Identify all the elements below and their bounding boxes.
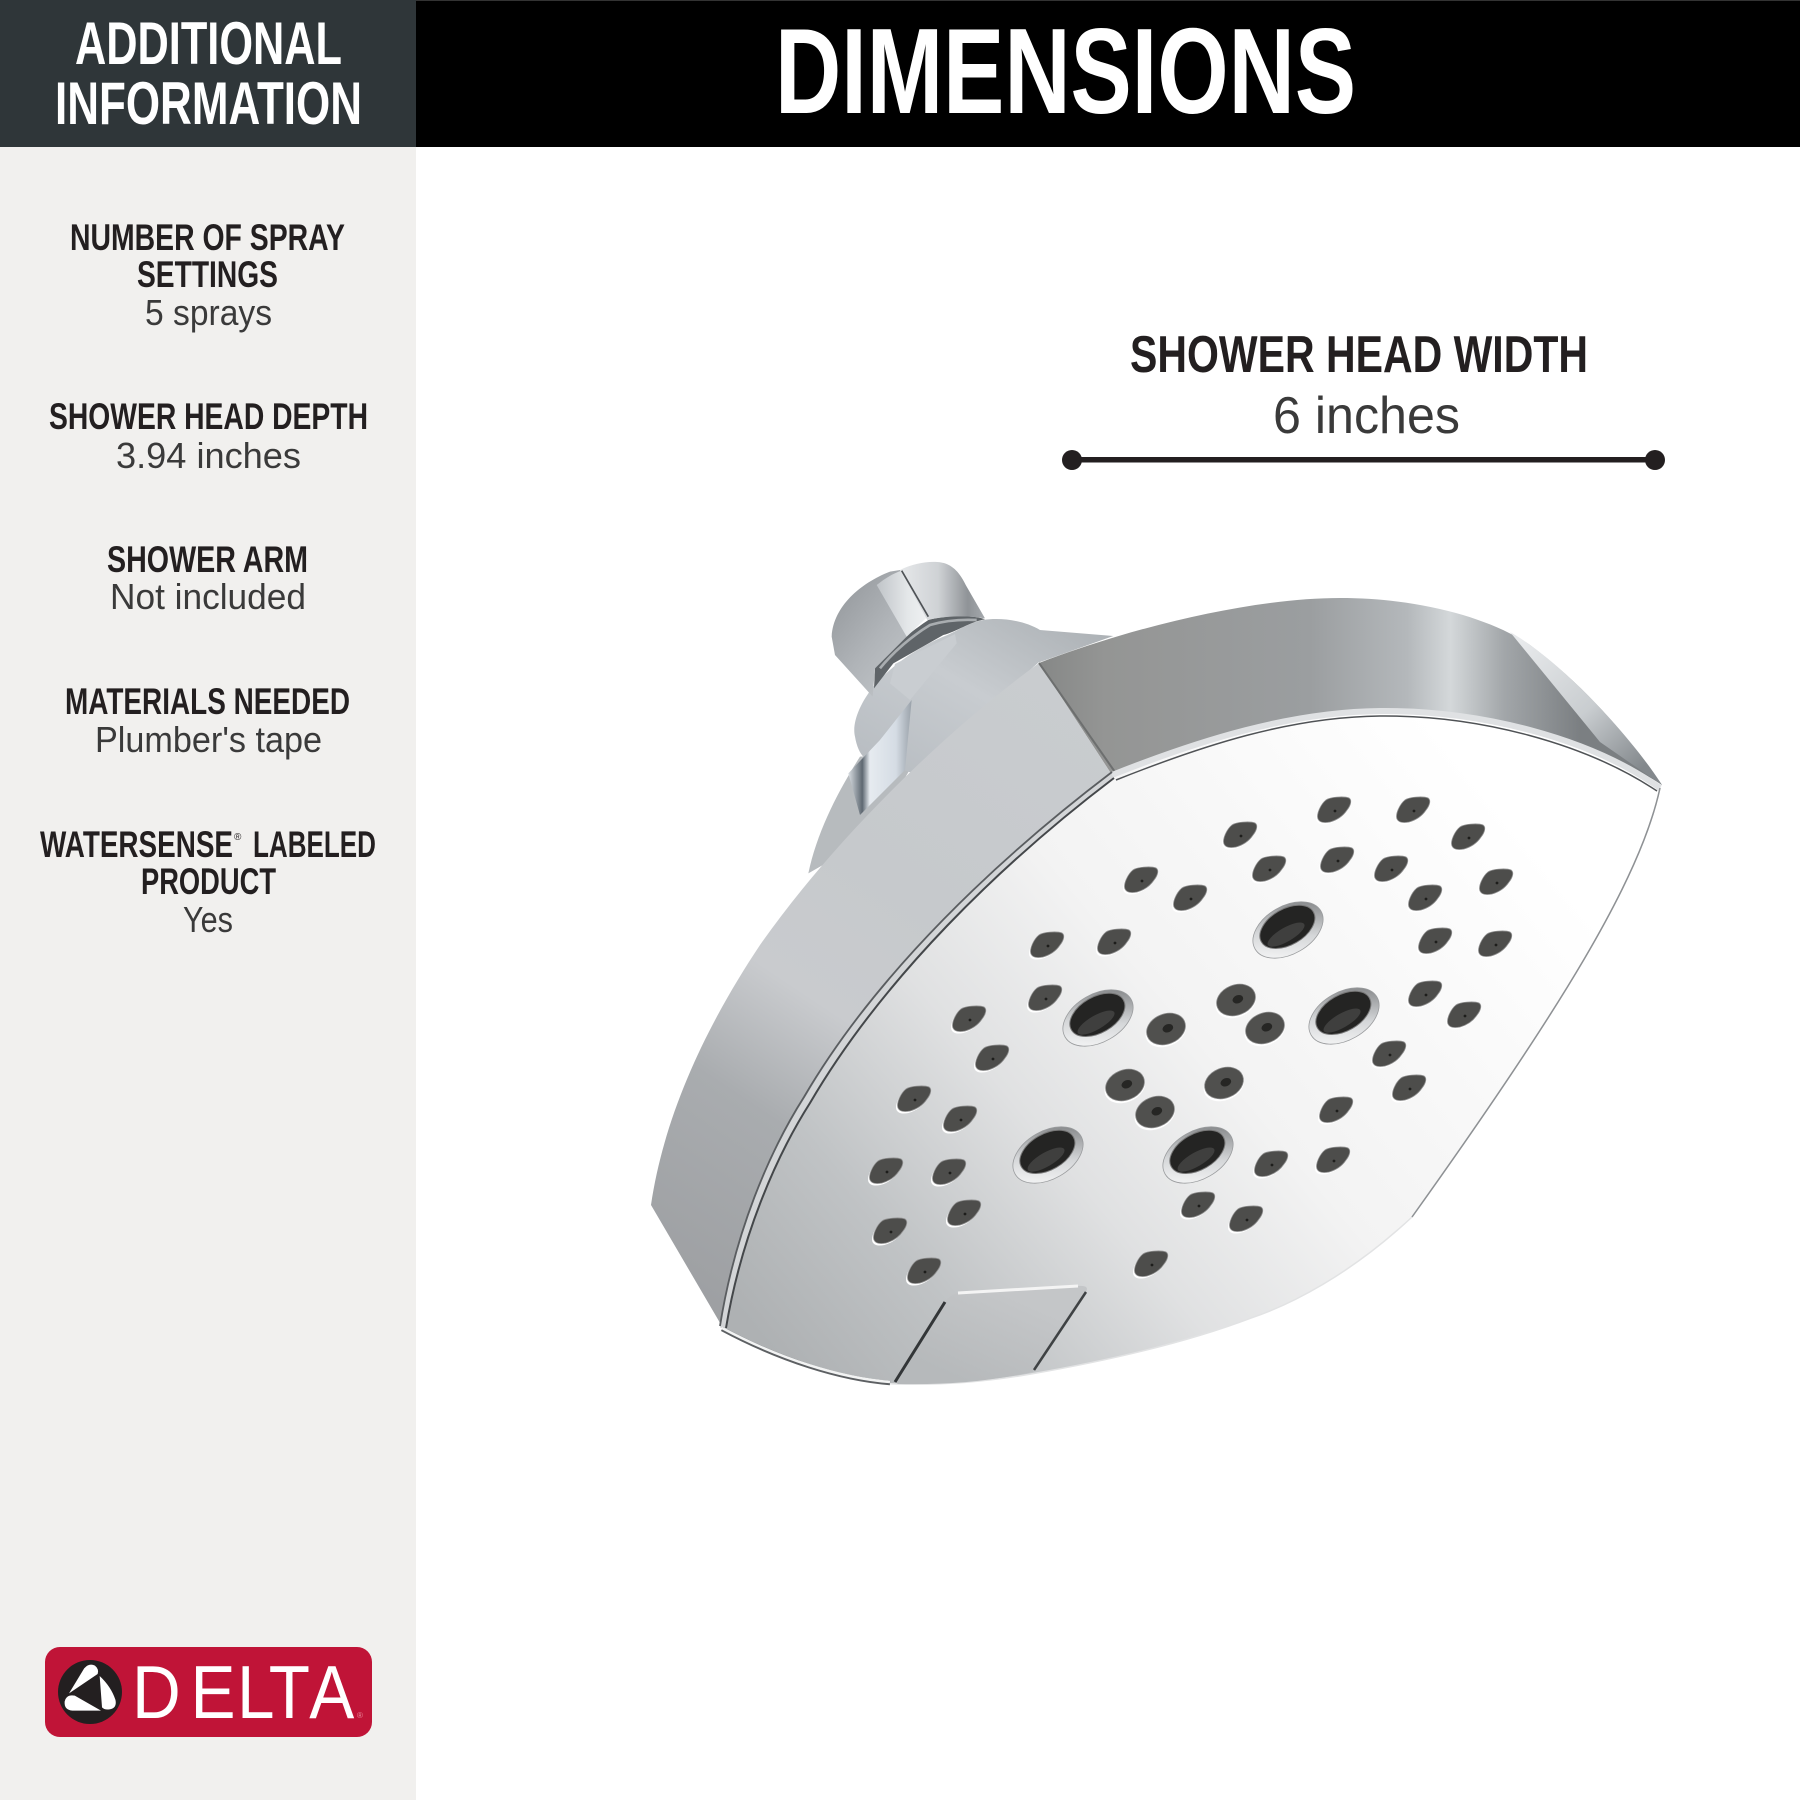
body: right side sliver — [1510, 632, 1662, 785]
text block: number of spray settings: 5 sprays — [145, 292, 272, 333]
text block: shower arm: Not included — [110, 576, 306, 617]
text block: shower head width: SHOWER HEAD WIDTH — [1130, 326, 1588, 384]
logo: delta: ® — [357, 1711, 363, 1720]
product image: shower head — [651, 562, 1662, 1384]
spray nozzles: small — [868, 797, 1513, 1286]
heading: additional information: INFORMATION — [55, 70, 362, 137]
text block: shower head width — [1130, 326, 1588, 445]
text block: shower head depth: 3.94 inches — [116, 435, 301, 476]
text block: shower arm — [107, 539, 308, 617]
button — [895, 1286, 1087, 1384]
neck and collar — [808, 562, 1113, 873]
dimension line: width — [1062, 450, 1665, 470]
text block: shower head depth: SHOWER HEAD DEPTH — [49, 396, 368, 437]
face edge: top and right — [1112, 711, 1660, 1217]
face edge: bottom highlight — [722, 1328, 890, 1383]
text block: watersense labeled product: PRODUCT — [141, 861, 276, 902]
text block: number of spray settings: SETTINGS — [137, 254, 278, 295]
heading: dimensions: DIMENSIONS — [775, 3, 1356, 139]
text block: watersense labeled product: LABELED — [253, 824, 376, 865]
text block: shower head width: 6 inches — [1273, 387, 1460, 445]
text block: materials needed — [65, 681, 350, 760]
heading: dimensions — [416, 0, 1800, 147]
spray nozzles: round centre — [1100, 979, 1290, 1136]
text block: shower head depth — [49, 396, 368, 476]
panel: sidebar background — [0, 146, 416, 1800]
text block: materials needed: MATERIALS NEEDED — [65, 681, 350, 722]
body: top side band — [1039, 598, 1662, 785]
text block: watersense labeled product: WATERSENSE — [40, 824, 233, 865]
logo: delta — [45, 1647, 372, 1737]
logo: delta: DELTA — [132, 1651, 355, 1735]
edge: ridge line — [1039, 663, 1115, 772]
text block: number of spray settings — [70, 217, 345, 333]
face plate — [723, 711, 1660, 1384]
text block: materials needed: Plumber's tape — [95, 719, 322, 760]
text block: shower arm: SHOWER ARM — [107, 539, 308, 580]
spray nozzles: large — [1003, 890, 1389, 1195]
heading: additional information — [0, 0, 416, 147]
text block: number of spray settings: NUMBER OF SPRAY — [70, 217, 345, 258]
face edge: left lines — [720, 772, 1114, 1328]
text block: watersense labeled product — [40, 824, 376, 940]
text block: watersense labeled product: Yes — [183, 899, 233, 940]
body: left side band — [651, 663, 1112, 1328]
heading: additional information: ADDITIONAL — [75, 10, 342, 77]
text block: watersense labeled product: ® — [234, 832, 242, 843]
